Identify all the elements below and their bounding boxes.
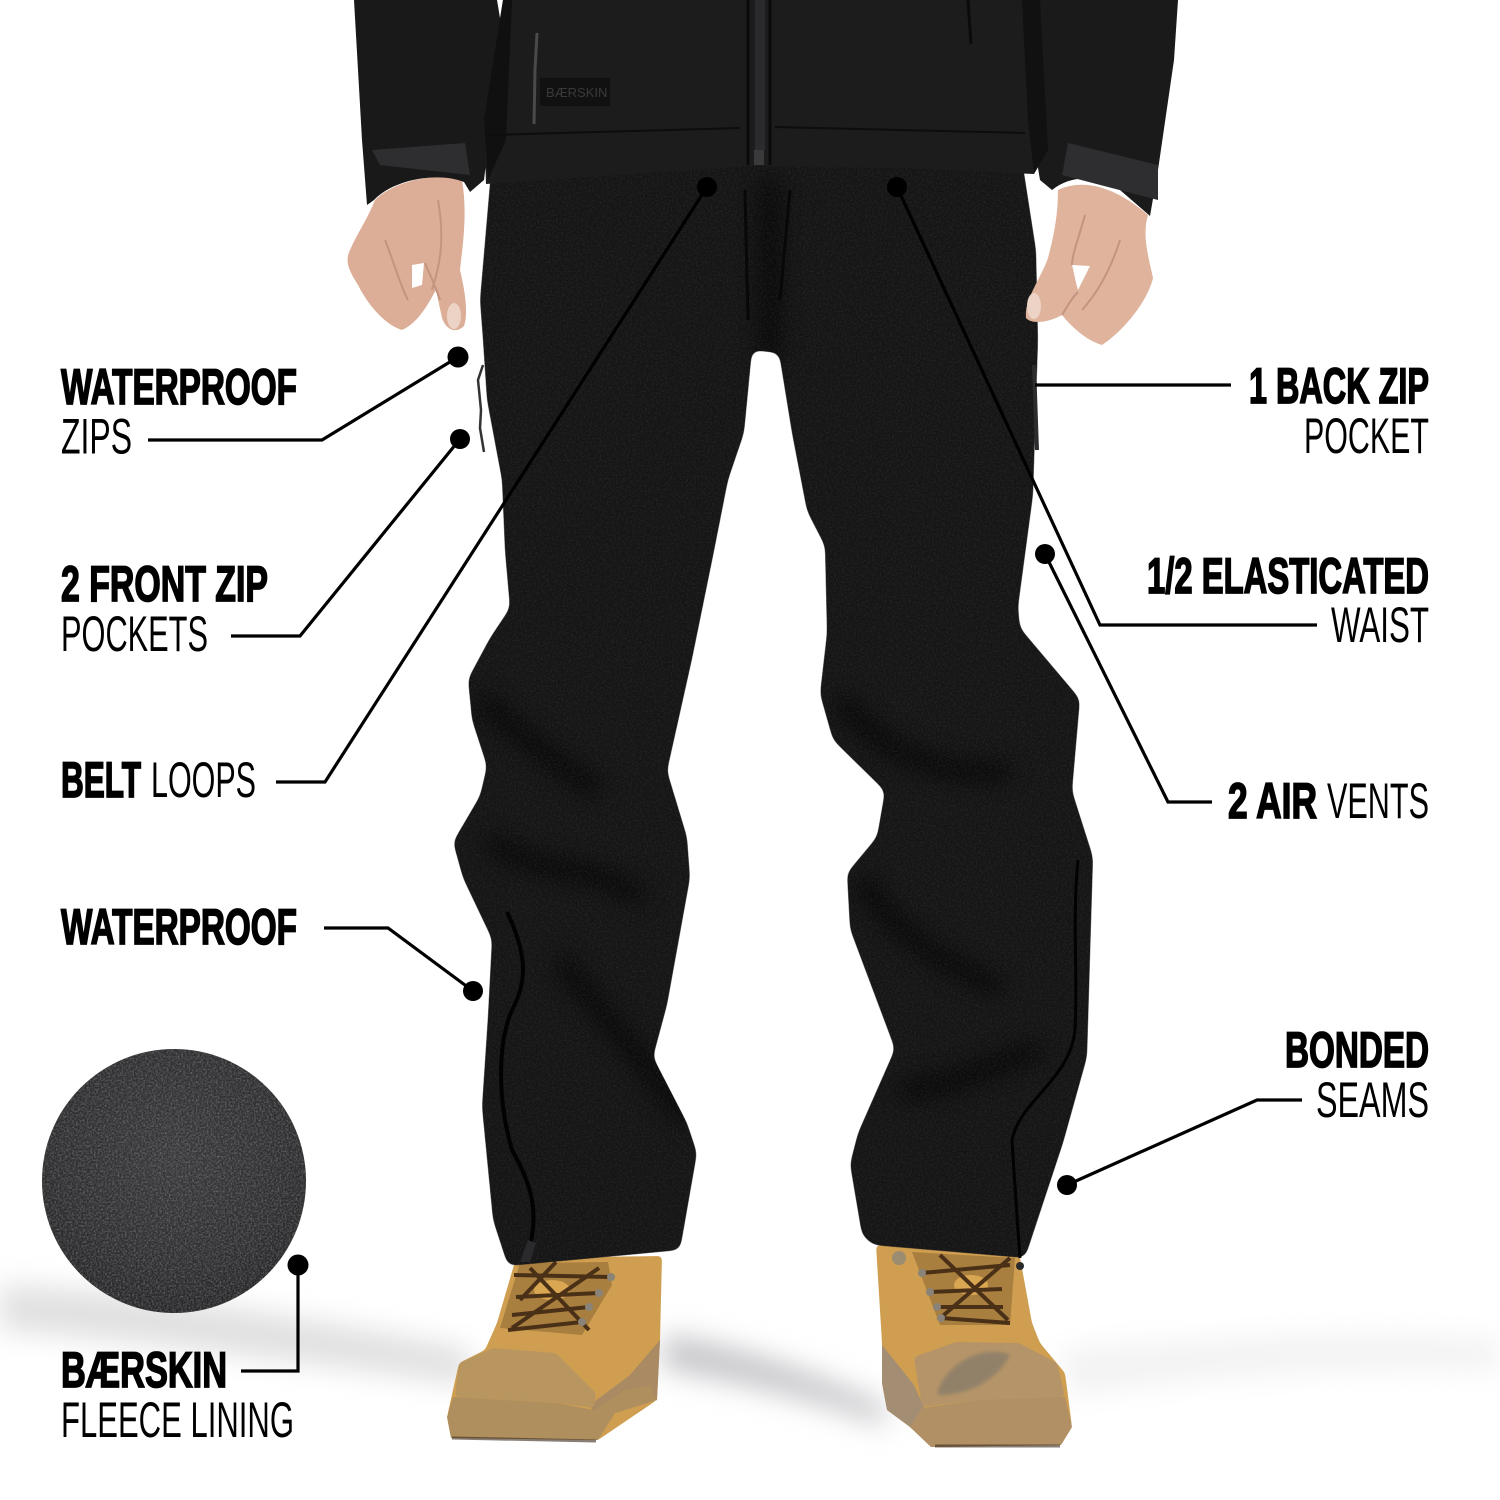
callout: 1/2 elasticated waist: WAIST: [1331, 597, 1429, 653]
callout: 2 front zip pockets: [61, 429, 470, 662]
callout: 2 front zip pockets: POCKETS: [61, 606, 208, 662]
model: jacket: [354, 0, 1178, 216]
callout: belt loops: BELT: [61, 752, 141, 808]
callout: bonded seams: [1057, 1022, 1429, 1195]
model: hands: [348, 177, 1153, 345]
callout: 1 back zip pocket: [1035, 358, 1429, 464]
right sleeve: [1026, 0, 1178, 216]
seams and zips: [501, 912, 534, 1262]
callout: waterproof: WATERPROOF: [61, 899, 297, 955]
zip and hem details: [748, 0, 770, 165]
callout: belt loops: LOOPS: [151, 752, 256, 808]
icon: right hand: [1026, 185, 1153, 345]
callout: baerskin fleece lining: FLEECE LINING: [61, 1392, 294, 1448]
callout: bonded seams: SEAMS: [1316, 1072, 1429, 1128]
callout: baerskin fleece lining: [61, 1254, 308, 1448]
icon: left boot: [447, 1256, 662, 1441]
callout: belt loops: [61, 177, 717, 808]
jacket body: [484, 0, 1034, 184]
callout: 2 air vents: [1035, 544, 1429, 829]
left sleeve: [354, 0, 502, 205]
model: boots: [447, 1245, 1072, 1447]
cuff tabs: [372, 143, 470, 175]
callout: waterproof zips: ZIPS: [61, 408, 132, 464]
model: pants: [440, 160, 1110, 1270]
callout: waterproof zips: [61, 346, 468, 464]
callout: bonded seams: BONDED: [1285, 1022, 1429, 1078]
fold shading: [440, 160, 1110, 1270]
callout: waterproof zips: WATERPROOF: [61, 359, 297, 415]
callout: baerskin fleece lining: BÆRSKIN: [61, 1342, 227, 1398]
callout: waterproof: [61, 899, 483, 1001]
callout: 2 air vents: VENTS: [1327, 773, 1429, 829]
fleece swatch: [42, 1049, 306, 1313]
icon: left hand: [348, 177, 466, 330]
callout: 2 front zip pockets: 2 FRONT ZIP: [61, 556, 268, 612]
floor shadows: [0, 1285, 1500, 1425]
icon: right boot: [876, 1245, 1072, 1447]
model: jacket: BÆRSKIN: [546, 85, 607, 100]
callout: 1/2 elasticated waist: [887, 177, 1429, 653]
callout: 2 air vents: 2 AIR: [1228, 773, 1317, 829]
